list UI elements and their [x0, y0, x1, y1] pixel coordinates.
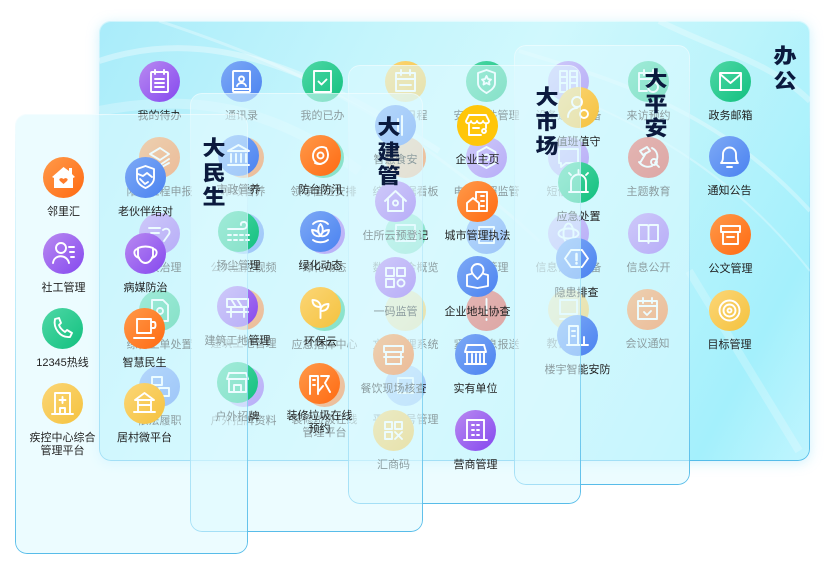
item: 资料 — [210, 368, 276, 427]
item: 汇商码: 汇商码 — [377, 459, 410, 471]
item: 目标管理 — [708, 290, 752, 351]
heading: 大市场: 市 — [536, 105, 558, 135]
item: 餐饮现场核查 — [352, 334, 434, 394]
item: 政务邮箱: 政务邮箱 — [708, 110, 752, 122]
heading: 大平安: 平 — [644, 87, 668, 117]
heading: 大建管: 大 — [378, 110, 400, 140]
item: 综合数据看板: 综合数据看板 — [372, 186, 438, 198]
item: 建筑工地管理 — [196, 286, 278, 346]
heading: 大建管: 管 — [378, 159, 400, 189]
item: back purple: 绿化动态 — [302, 262, 346, 274]
item: 智慧民生: 智慧民生 — [122, 357, 166, 369]
item: 隐患排查 — [554, 238, 598, 299]
item: 企业地址协查: 企业地址协查 — [444, 306, 510, 318]
item: 楼宇智能安防: 楼宇智能安防 — [544, 364, 610, 376]
item: 隐患排查: 隐患排查 — [554, 287, 598, 299]
item: 紧急信息报送 — [454, 290, 520, 351]
item: 环保云: 环保云 — [304, 336, 337, 348]
heading: 大建管: 建 — [378, 135, 400, 165]
item: 病媒防治 — [104, 233, 186, 293]
item: 电子证照监管: 电子证照监管 — [454, 186, 520, 198]
item: 住所云预登记 — [354, 181, 436, 241]
item: 企业地址协查 — [436, 256, 518, 316]
heading: 办公 — [772, 42, 798, 91]
panel: 邻里: 管理平台 — [40, 445, 84, 457]
item: 社工管理: 社工管理 — [42, 282, 86, 294]
heading: 大民生 — [201, 134, 227, 208]
item: 绿化动态: 绿化动态 — [298, 260, 342, 272]
item: 智慧民生 — [103, 308, 185, 368]
item: 邻里汇 — [22, 157, 104, 217]
item: 社工管理 — [22, 233, 104, 293]
item: 楼宇智能安防 — [544, 315, 610, 376]
item: 装修垃圾在线预约: 装修垃圾在线 — [286, 410, 352, 422]
item: 通讯录 — [221, 61, 262, 122]
heading: 大民生: 生 — [202, 180, 226, 210]
heading: 大建管 — [376, 113, 402, 187]
item: 市政管养: 市政管养 — [216, 184, 260, 196]
item: 我的待办: 我的待办 — [138, 110, 182, 122]
panel: 大建管 — [348, 65, 581, 504]
item: 值班值守: 值班值守 — [556, 136, 600, 148]
item: 阳光工程申报: 阳光工程申报 — [126, 186, 192, 198]
heading: 大市场: 大 — [536, 80, 558, 110]
item: 会议通知 — [626, 289, 670, 350]
item: 一码监管 — [354, 257, 436, 317]
item: 综合数据看板 — [372, 138, 438, 198]
heading: 办公: 公 — [774, 64, 796, 94]
item: 户外招牌 — [196, 362, 278, 422]
item: 公文管理: 公文管理 — [708, 263, 752, 275]
item: 依法履职 — [138, 366, 182, 427]
item: 通讯录: 通讯录 — [225, 110, 258, 122]
item: 领导值班 back: 市政管养 — [222, 186, 266, 198]
heading: 大民生: 民 — [202, 156, 226, 186]
item: 智慧食安 — [354, 105, 436, 165]
item: 装修垃圾在线预约 — [278, 363, 360, 423]
item: 会议通知: 会议通知 — [626, 338, 670, 350]
item: 城市管理执法 — [436, 181, 518, 241]
item: 通知公告 — [708, 136, 752, 197]
item: 阳光工程申报 — [126, 137, 192, 198]
item: 教育培训: 教育培训 — [546, 338, 590, 350]
item: 老伙伴结对 — [104, 157, 186, 217]
item: 我的日程 — [384, 61, 428, 122]
item: 污染治理 — [138, 213, 182, 274]
item: 目标管理: 目标管理 — [708, 339, 752, 351]
item: 汇商码 — [352, 410, 434, 470]
item: 智慧食安: 智慧食安 — [374, 154, 418, 166]
item: 数据概览 — [372, 214, 438, 274]
item: 综合工单处置: 综合工单处置 — [126, 339, 192, 351]
item: 综合工单处置 — [126, 290, 192, 351]
panel: 大民生 — [190, 93, 423, 532]
item: 户外招牌: 户外招牌 — [216, 411, 260, 423]
heading: 大市场: 场 — [536, 129, 558, 159]
item: 病媒防治: 病媒防治 — [124, 282, 168, 294]
item: 餐饮现场核查: 餐饮现场核查 — [360, 383, 426, 395]
item: 城市管理执法: 城市管理执法 — [444, 230, 510, 242]
panel: 大平安 — [514, 45, 690, 485]
item: 短信平台 — [546, 137, 590, 198]
item: 一码监管: 一码监管 — [374, 306, 418, 318]
item: 我的待办 — [138, 61, 182, 122]
item: 环保云 — [279, 287, 361, 347]
item: 营商管理: 营商管理 — [454, 459, 498, 471]
item: 防台防汛: 防台防汛 — [298, 184, 342, 196]
item: 管理平台 — [292, 368, 358, 439]
heading: 大平安 — [643, 65, 669, 139]
item: 安全事件管理 — [454, 61, 520, 122]
heading: 办公: 办 — [774, 39, 796, 69]
heading: 大平安: 大 — [644, 62, 668, 92]
item: 扬尘管理 — [197, 211, 279, 271]
item: 我的已办: 我的已办 — [300, 110, 344, 122]
item: 营商管理 — [434, 410, 516, 470]
item: 住所云预登记: 住所云预登记 — [362, 230, 428, 242]
item: 疾控中心综合管理平台: 疾控中心综合 — [30, 432, 96, 444]
item: 信息公开: 信息公开 — [626, 262, 670, 274]
item: 短信平台: 短信平台 — [546, 186, 590, 198]
item: 防台防汛 — [279, 135, 361, 195]
item: 紧急信息报送: 紧急信息报送 — [454, 339, 520, 351]
item: 电子证照监管 — [454, 138, 520, 198]
item: 企业主页 — [436, 105, 518, 165]
heading: 大民生: 大 — [202, 131, 226, 161]
item: 12345热线: 12345热线 — [36, 357, 89, 369]
item: 来访预约: 来访预约 — [626, 110, 670, 122]
item: 通知公告: 通知公告 — [708, 185, 752, 197]
item: 疾控中心综合管理平台 — [21, 383, 103, 443]
item: 老伙伴结对: 老伙伴结对 — [118, 206, 173, 218]
item: 实有单位 — [434, 334, 516, 394]
panel: 大民生: 预约 — [308, 423, 330, 435]
item: 邻里汇: 邻里汇 — [47, 206, 80, 218]
item: 12345热线 — [21, 308, 103, 368]
item: 建筑工地管理: 建筑工地管理 — [204, 335, 270, 347]
panel: 办公: 管理平台 — [302, 427, 346, 439]
item: 领导值班安排: 领导值班安排 — [290, 186, 356, 198]
panel: 邻里 — [15, 114, 248, 554]
item: 绿化动态 — [279, 211, 361, 271]
item: 值班值守 — [556, 87, 600, 148]
item: back orange — [210, 290, 276, 350]
item: 我的已办 — [300, 61, 344, 122]
item: 实有单位: 实有单位 — [454, 383, 498, 395]
item: 来访预约 — [626, 61, 670, 122]
item: 管理平台: 装修垃圾在线 — [292, 414, 358, 426]
item: 指挥中心: 应急指挥中心 — [292, 339, 358, 351]
item: 主题教育: 主题教育 — [626, 186, 670, 198]
item: 平台账号管理: 平台账号管理 — [372, 414, 438, 426]
heading: 大平安: 安 — [644, 111, 668, 141]
item: 文档管理系统 — [372, 291, 438, 351]
heading: 大市场 — [534, 83, 560, 157]
item: 居村微平台 — [103, 383, 185, 443]
item: 居村微平台: 居村微平台 — [117, 432, 172, 444]
item: 文档管理系统: 文档管理系统 — [372, 339, 438, 351]
item: 企业主页: 企业主页 — [456, 154, 500, 166]
item: 应急处置: 应急处置 — [556, 211, 600, 223]
item: 信息设备: 信息设备报备 — [536, 262, 602, 274]
item: 资料: 户外招牌资料 — [210, 415, 276, 427]
item: 扬尘管理: 扬尘管理 — [216, 260, 260, 272]
item: 安全事件管理: 安全事件管理 — [454, 110, 520, 122]
item: back orange: 建筑工地管理 — [210, 338, 276, 350]
item: 信息设备 — [536, 213, 602, 274]
item: 我的日程: 我的日程 — [384, 110, 428, 122]
item: 设备管理 — [536, 61, 602, 122]
item: 依法履职: 依法履职 — [138, 415, 182, 427]
item: 平台账号管理 — [372, 366, 438, 426]
item: 主题教育 — [626, 137, 670, 198]
item: 资产管理 — [464, 214, 508, 274]
panel: 办公 — [99, 21, 810, 461]
item: 公文管理 — [708, 214, 752, 275]
item: 政务邮箱 — [708, 61, 752, 122]
item: 设备管理: 设备巡检报备 — [536, 110, 602, 122]
item: 教育培训 — [546, 289, 590, 350]
item: 信息公开 — [626, 213, 670, 274]
item: 领导值班 back — [222, 138, 266, 198]
item: 资产管理: 资产管理 — [464, 262, 508, 274]
item: 数据概览: 数据综合概览 — [372, 262, 438, 274]
item: 领导值班安排 — [290, 140, 356, 198]
item: 视频 — [210, 214, 276, 274]
item: 市政管养 — [197, 135, 279, 195]
item: 视频: 公共监控视频 — [210, 262, 276, 274]
item: 应急处置 — [556, 162, 600, 223]
item: 污染治理: 污染治理 — [138, 262, 182, 274]
item: 指挥中心 — [292, 292, 358, 351]
item: back purple — [302, 214, 346, 274]
